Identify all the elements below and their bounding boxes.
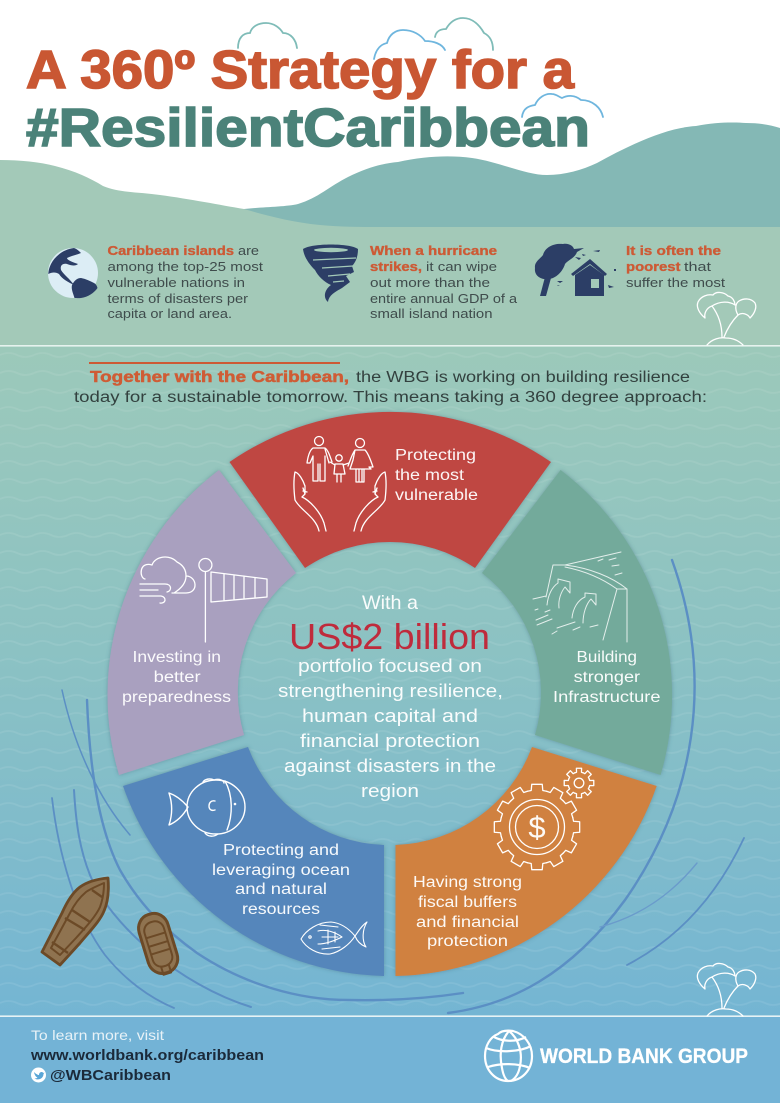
label: building stronger infrastructure: Infrastructure	[553, 689, 660, 706]
centre text	[278, 592, 503, 801]
centre text: US$2 billion	[289, 616, 490, 657]
centre text: against disasters in the	[284, 756, 496, 776]
footer links	[30, 1027, 264, 1084]
label: protecting the most vulnerable: Protecting	[395, 447, 476, 464]
label: protecting the most vulnerable	[395, 447, 478, 504]
label: fiscal buffers: fiscal buffers	[418, 894, 517, 911]
hill: front green band	[0, 160, 780, 346]
text: strikes,	[370, 259, 422, 274]
hill: back teal	[244, 122, 780, 232]
segment: protecting the most vulnerable	[230, 412, 551, 568]
label: building stronger infrastructure	[553, 649, 660, 706]
label: ocean and natural resources	[212, 842, 350, 918]
icon: sea wall with waves	[533, 552, 627, 642]
logo: World Bank Group	[485, 1031, 748, 1081]
text: out more than the	[370, 275, 490, 290]
icon: tree and house in storm	[535, 244, 616, 296]
text	[370, 243, 518, 321]
boat: small	[135, 910, 182, 978]
label: fiscal buffers	[413, 874, 522, 950]
intro text	[74, 369, 707, 406]
icon: wind cloud and windsock	[140, 557, 267, 642]
icon: palm island top	[697, 292, 756, 345]
label: fiscal buffers: and financial	[416, 914, 519, 931]
text: poorest	[626, 259, 681, 274]
icon: globe	[48, 248, 98, 298]
label: fiscal buffers: Having strong	[413, 874, 522, 891]
text	[626, 243, 725, 290]
label: fiscal buffers: protection	[427, 933, 508, 950]
centre text: strengthening resilience,	[278, 681, 503, 701]
label: ocean and natural resources: and natural	[235, 881, 327, 898]
big gear	[494, 784, 580, 870]
centre text: With a	[362, 592, 418, 614]
logo: World Bank Group: WORLD BANK GROUP	[540, 1045, 748, 1068]
segment: building stronger infrastructure	[482, 470, 672, 775]
footer band	[0, 1016, 780, 1103]
footer links: To learn more, visit	[31, 1027, 164, 1043]
icon: palm island bottom	[697, 963, 756, 1016]
text: capita or land area.	[108, 306, 232, 321]
icon: family in hands	[294, 436, 386, 531]
clouds	[238, 18, 603, 117]
intro text: the WBG is working on building resilience	[356, 369, 690, 386]
centre text: region	[361, 781, 419, 801]
small gear	[564, 768, 594, 798]
text	[108, 243, 263, 321]
text: are	[238, 243, 259, 258]
icon: round fish	[169, 779, 245, 836]
segment: ocean and natural resources	[123, 747, 384, 976]
label: better preparedness: preparedness	[122, 689, 231, 706]
footer links: @WBCaribbean	[50, 1067, 171, 1084]
title: A 360º Strategy for a	[26, 40, 575, 100]
label: ocean and natural resources: Protecting and	[223, 842, 339, 859]
label: ocean and natural resources: resources	[242, 901, 320, 918]
donut wheel	[107, 412, 672, 976]
fact: Caribbean islands	[48, 243, 263, 321]
label: better preparedness	[122, 649, 231, 706]
label: protecting the most vulnerable: vulnerable	[395, 487, 478, 504]
text: entire annual GDP of a	[370, 291, 518, 306]
segment: strong fiscal buffers	[396, 747, 657, 976]
label: better preparedness: Investing in	[132, 649, 221, 666]
icon: gears with dollar sign	[494, 768, 594, 870]
title	[26, 40, 590, 158]
footer links: www.worldbank.org/caribbean	[30, 1047, 264, 1064]
wave pattern	[0, 346, 780, 1017]
text: It is often the	[626, 243, 721, 258]
fact: poorest	[535, 243, 725, 296]
icon: tornado	[303, 244, 358, 302]
label: ocean and natural resources: leveraging ocean	[212, 862, 350, 879]
title: #ResilientCaribbean	[26, 98, 590, 158]
text: vulnerable nations in	[108, 275, 245, 290]
boat: large	[42, 878, 108, 965]
text: terms of disasters per	[108, 291, 249, 306]
text: suffer the most	[626, 275, 725, 290]
rule above intro	[89, 362, 340, 364]
water background	[0, 346, 780, 1017]
centre text: financial protection	[300, 731, 480, 751]
text: Caribbean islands	[108, 243, 234, 258]
centre text: portfolio focused on	[298, 656, 482, 676]
text: that	[684, 259, 711, 274]
fact: hurricane	[303, 243, 518, 321]
label: better preparedness: better	[154, 669, 201, 686]
label: building stronger infrastructure: stronger	[574, 669, 640, 686]
text: When a hurricane	[370, 243, 497, 258]
centre text: human capital and	[302, 706, 478, 726]
text: among the top-25 most	[108, 259, 263, 274]
label: building stronger infrastructure: Building	[576, 649, 637, 666]
icon: striped fish	[301, 922, 367, 954]
swirl lines	[52, 560, 744, 1013]
icon: twitter	[31, 1068, 46, 1082]
segment: better preparedness	[107, 470, 296, 775]
text: small island nation	[370, 306, 492, 321]
intro text: today for a sustainable tomorrow. This means taking a 360 degree approach:	[74, 389, 707, 406]
intro text: Together with the Caribbean,	[90, 369, 349, 386]
dollar sign: $	[528, 810, 546, 845]
label: protecting the most vulnerable: the most	[395, 467, 465, 484]
text: it can wipe	[426, 259, 497, 274]
